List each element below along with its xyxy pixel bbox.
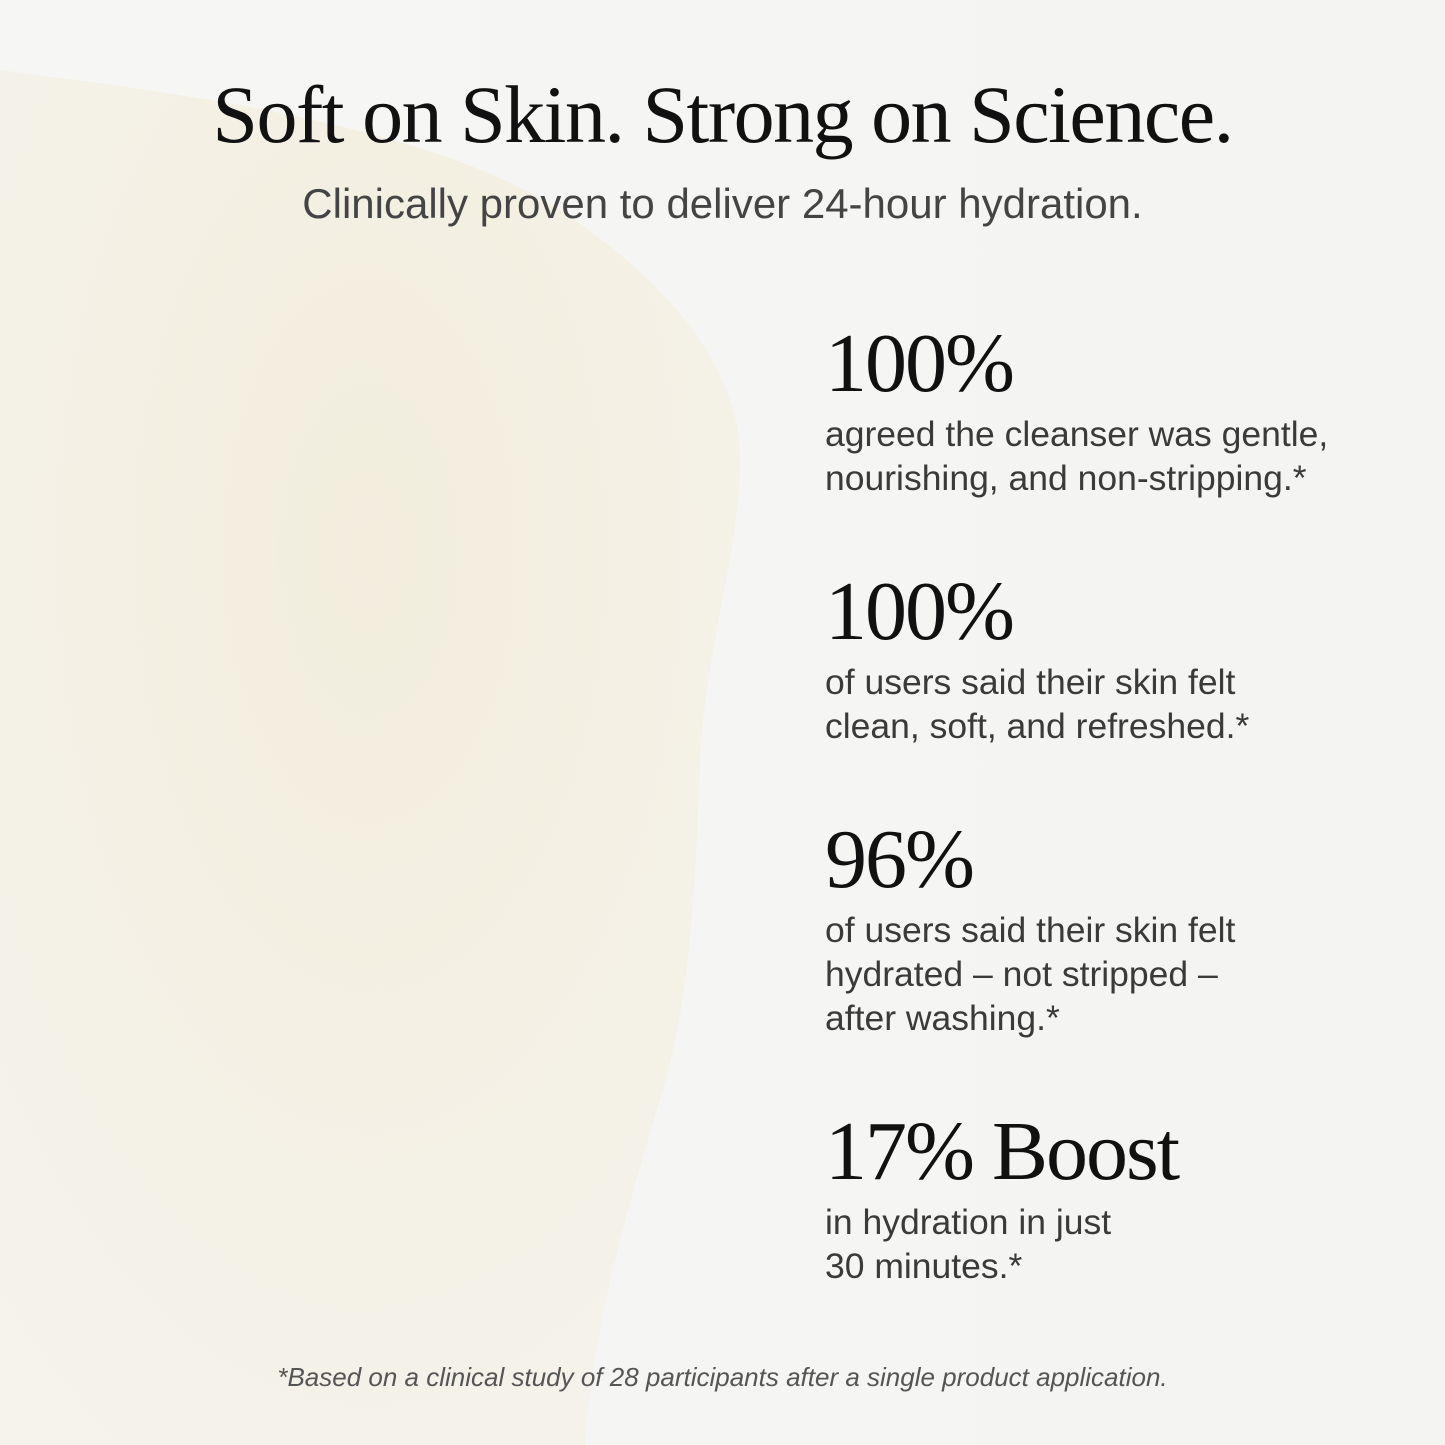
stat 2: of users said their skin felt (825, 662, 1235, 702)
stat 1: 100% (825, 317, 1013, 410)
stat 2 (825, 565, 1249, 746)
stat 3: hydrated – not stripped – (825, 954, 1218, 994)
stat 4 (825, 1105, 1180, 1286)
stat 3 (825, 813, 1236, 1038)
stat 3: of users said their skin felt (825, 910, 1235, 950)
stat 3: 96% (825, 813, 973, 906)
title: Soft on Skin. Strong on Science. (212, 69, 1233, 160)
stat 4: 17% Boost (825, 1105, 1178, 1198)
stat 1 (825, 317, 1328, 498)
stat 4: in hydration in just (825, 1202, 1111, 1242)
stat 4: 30 minutes.* (825, 1246, 1022, 1286)
footnote: *Based on a clinical study of 28 participants after a single product application. (277, 1362, 1168, 1392)
stat 2: 100% (825, 565, 1013, 658)
stat 1: nourishing, and non-stripping.* (825, 458, 1307, 498)
subtitle: Clinically proven to deliver 24-hour hydration. (302, 180, 1143, 227)
stat 1: agreed the cleanser was gentle, (825, 414, 1328, 454)
stat 3: after washing.* (825, 998, 1060, 1038)
stat 2: clean, soft, and refreshed.* (825, 706, 1249, 746)
